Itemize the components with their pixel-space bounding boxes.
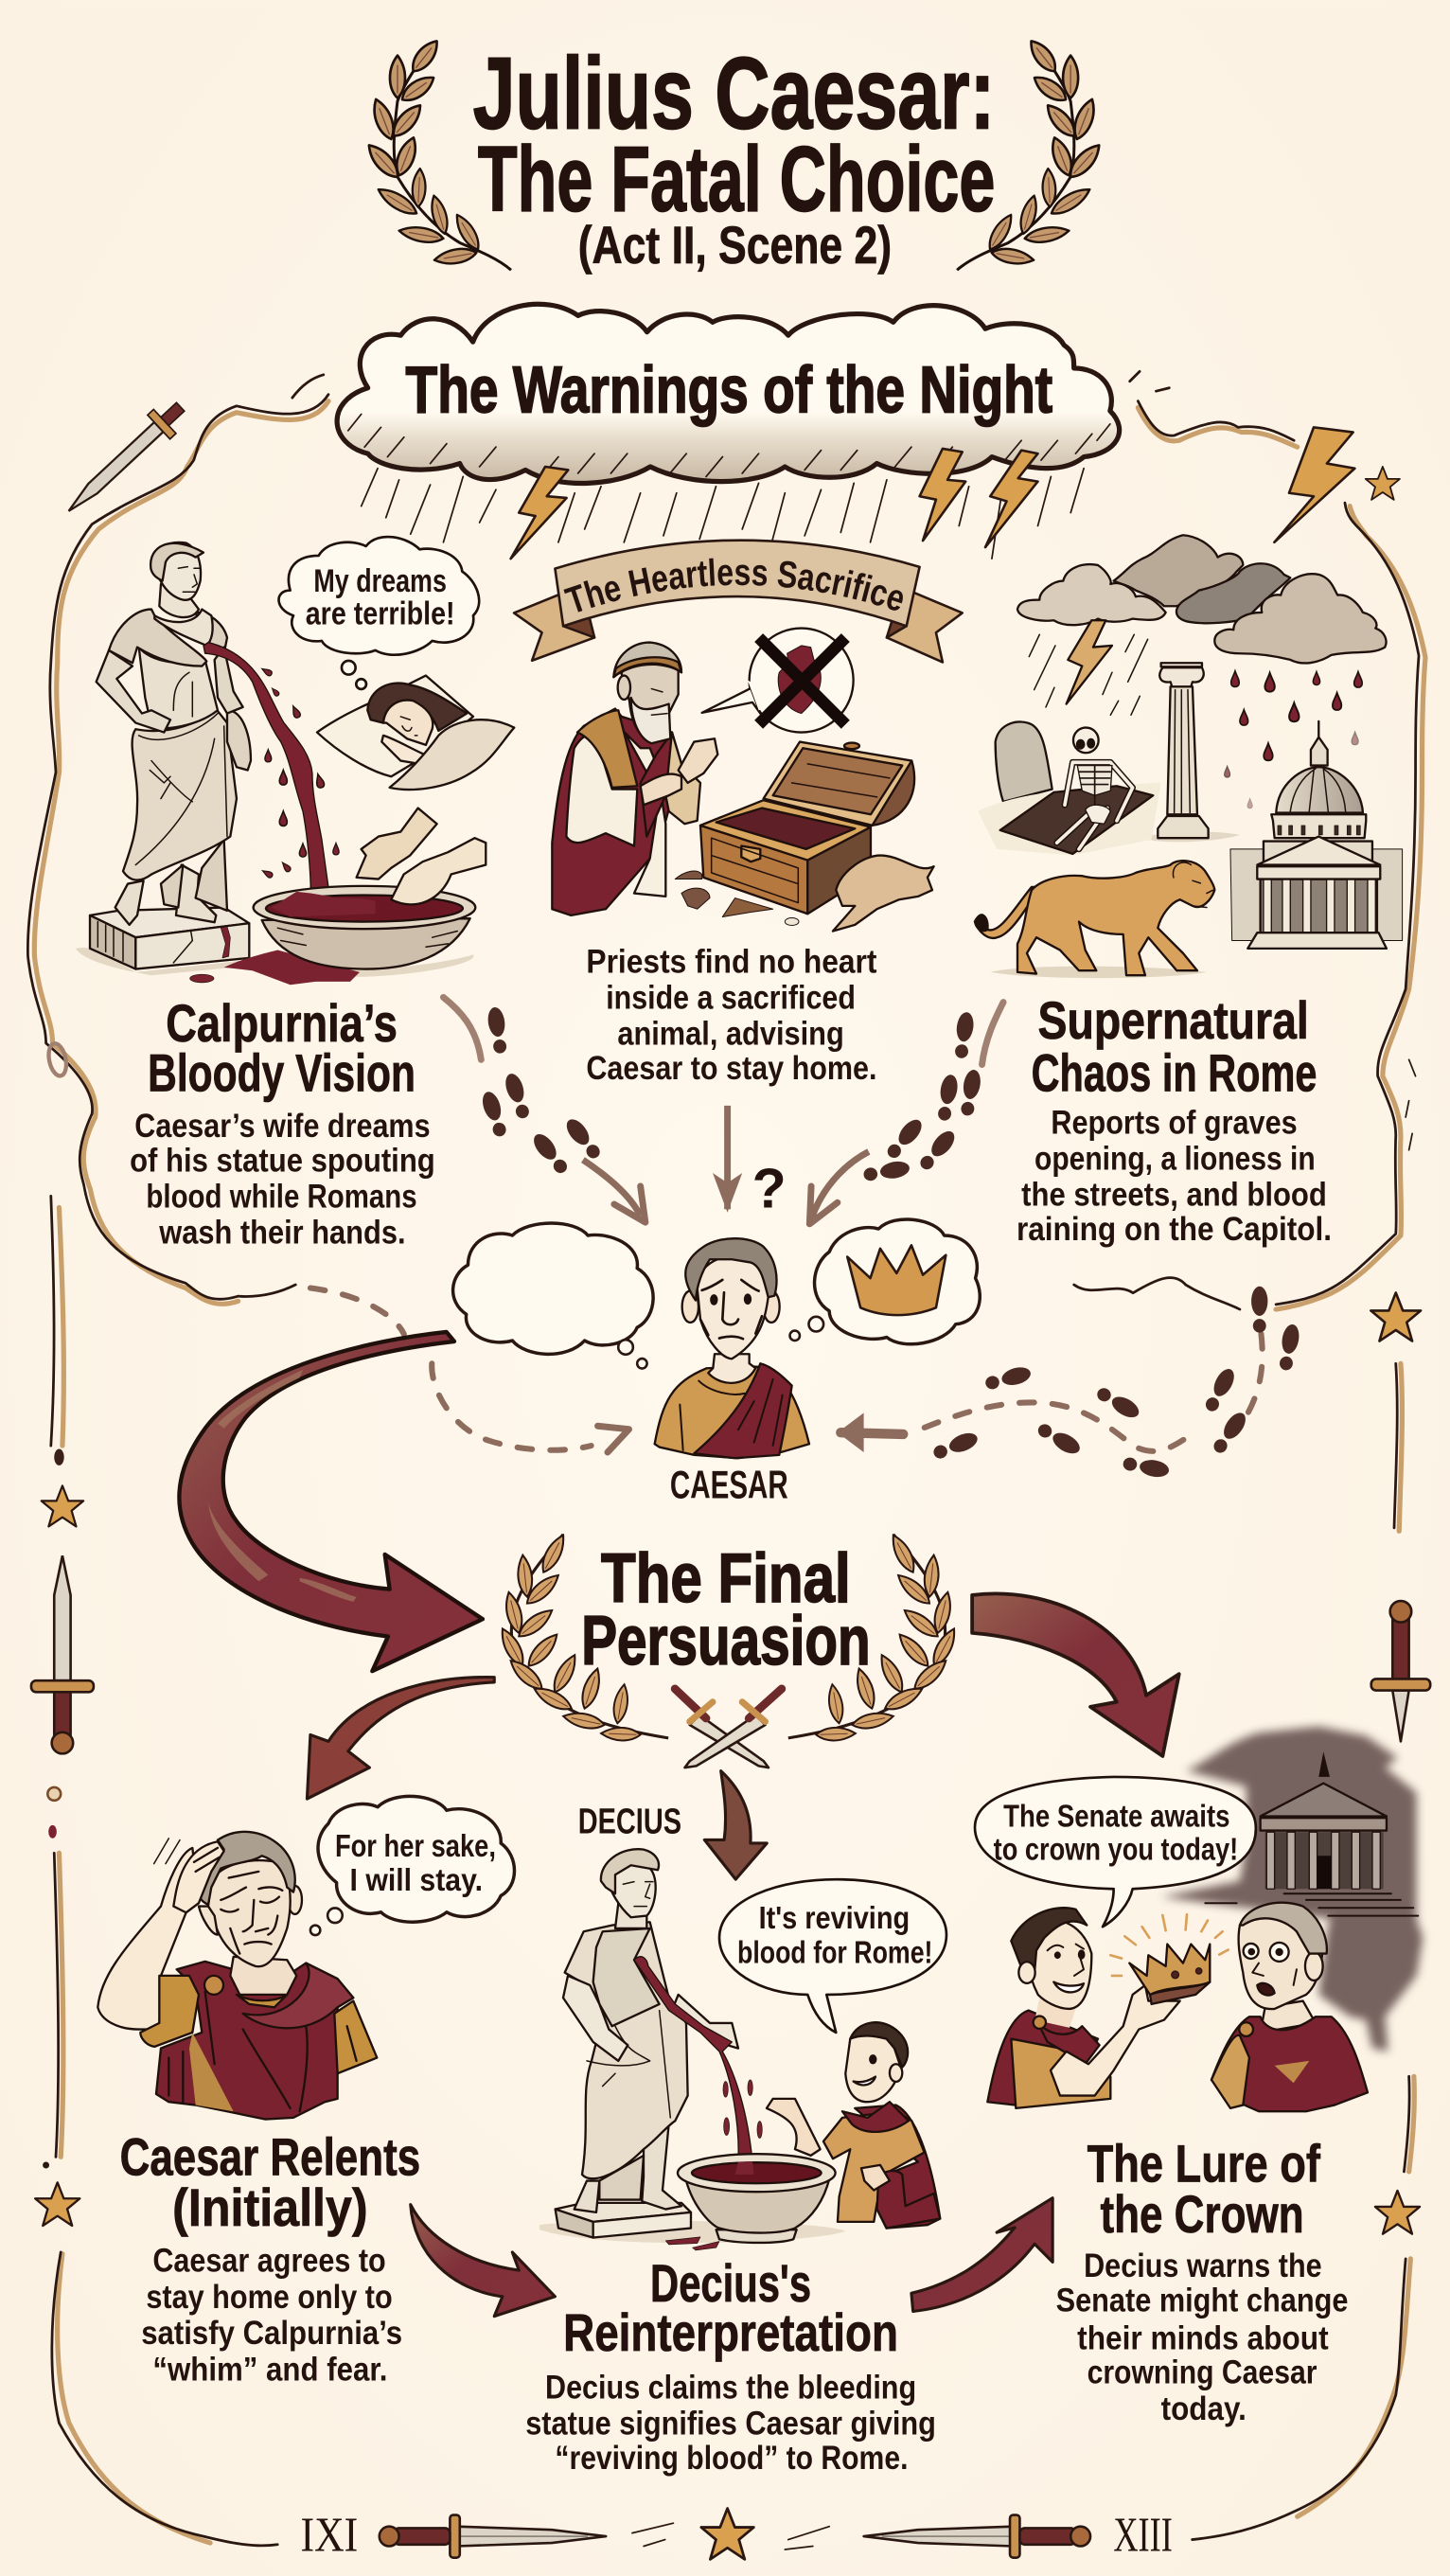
panel: The Lure of the Crown [975,1727,1423,2427]
icon: stones and scraps [675,871,799,926]
thought cloud empty [453,1223,653,1369]
icon: blood puddle [190,950,360,985]
arrow: Caesar relents to Decius [411,2205,555,2317]
body text: animal, advising [617,1015,844,1053]
icon: lioness [975,861,1214,978]
icon: star right lower [1375,2191,1420,2234]
body text [1056,2247,1348,2427]
banner: The Heartless Sacrifice [564,559,903,613]
bubble text: My dreams [313,563,447,599]
arrow: to Caesar Relents [307,1678,494,1799]
body text: “whim” and fear. [152,2350,387,2388]
body text [586,942,877,1087]
icon: top left dagger [58,395,191,523]
icon: lightning bolt three [985,451,1038,547]
illustration: priest, heart and chest [552,629,934,932]
body text [1017,1103,1332,1248]
body text [141,2242,402,2388]
illustration: Senate, Decius and Caesar [975,1727,1423,2111]
title line one: Julius Caesar: [473,37,995,151]
icon: left laurel branch [363,36,511,270]
panel heading second line: Chaos in Rome [1032,1043,1317,1102]
side marks left [46,1042,69,1466]
icon: big lightning bolt right [1274,427,1354,542]
subtitle: (Act II, Scene 2) [578,216,892,275]
panel heading: Caesar Relents [120,2127,420,2186]
body text: Decius claims the bleeding [545,2368,916,2406]
side dots left [47,1787,61,1839]
body text: Caesar’s wife dreams [134,1107,431,1145]
icon: storm clouds [1017,535,1387,663]
body text: satisfy Calpurnia’s [141,2314,402,2352]
body text [130,1107,435,1252]
icon: empty treasure chest [700,742,914,914]
heading text line two: Persuasion [581,1603,871,1679]
body text: wash their hands. [158,1214,406,1252]
footprints trail right [862,1003,1003,1183]
icon: Caesar holding head [97,1832,377,2120]
icon: bowl [254,886,475,969]
shadow [539,2221,845,2243]
panel heading: The Lure of [1088,2134,1320,2193]
panel: The Heartless Sacrifice [513,539,964,1087]
arrow: center down to Caesar [713,1106,742,1213]
icon: statue [563,1849,738,2212]
rain strokes [1029,634,1148,715]
icon: startled Caesar [1211,1903,1368,2111]
panel heading second line: (Initially) [172,2178,368,2237]
panel: Calpurnia's bloody vision [76,537,514,1252]
icon: lightning bolt one [511,467,568,559]
footprints trail left [443,997,604,1177]
body text: “reviving blood” to Rome. [555,2439,908,2477]
icon: gravestone [996,721,1052,802]
body text: today. [1161,2389,1247,2427]
figure: worried Caesar [453,1219,980,1507]
icon: star right middle [1370,1292,1421,1341]
upper panel wobbly frame [27,371,1425,1309]
body text: the streets, and blood [1021,1176,1327,1214]
arrow: Decius to the crown [911,2198,1052,2311]
bubble text: For her sake, [335,1828,496,1863]
icon: plinth [556,2203,691,2238]
arrow: to The Lure of the Crown [972,1593,1179,1756]
illustration: omens in Rome [975,535,1403,978]
icon: temple [1205,1751,1418,1916]
footer ornament [301,2509,1173,2563]
body text: statue signifies Caesar giving [525,2405,936,2443]
arrow: right trail to Caesar [809,1151,869,1224]
speech bubble: The Senate awaits [975,1777,1256,1927]
icon: marble bowl [665,2154,836,2250]
icon: priest [552,643,717,915]
body text: Caesar to stay home. [586,1049,876,1087]
icon: right laurel [788,1532,960,1741]
label: DECIUS: DECIUS [578,1802,681,1842]
body text: Priests find no heart [586,942,877,980]
panel: Decius's reinterpretation [525,1802,946,2477]
dashed path left to Caesar [310,1288,629,1452]
lower frame and side strokes [43,1853,1414,2546]
bubble text second line: blood for Rome! [737,1935,932,1970]
icon: right horizontal dagger [864,2515,1090,2558]
icon: crossed out heart [702,629,854,733]
icon: star left lower [35,2182,80,2226]
label: CAESAR: CAESAR [670,1463,788,1507]
body text: of his statue spouting [130,1141,435,1179]
heading text: The Warnings of the Night [406,353,1052,427]
panel heading second line: Reinterpretation [563,2303,898,2362]
panel heading: Supernatural [1038,991,1309,1050]
illustration: statue, bowl and sleeping wife [76,537,514,985]
bubble text: The Senate awaits [1003,1799,1230,1834]
body text: crowning Caesar [1088,2354,1317,2391]
icon: star left middle [42,1485,83,1526]
body text: blood while Romans [146,1177,417,1215]
icon: small lightning bolt [1067,620,1112,704]
icon: blood rain drops [1225,671,1362,808]
bubble text second line: are terrible! [306,596,455,632]
icon: blood pouring from the statue [203,643,376,913]
arrow: left trail to Caesar [583,1160,645,1222]
shadows [76,948,473,977]
heading text line one: The Final [601,1540,851,1617]
big arrow into The Final Persuasion [179,1332,483,1671]
body text: stay home only to [146,2278,393,2316]
body text: inside a sacrificed [606,979,856,1017]
icon: Decius offering crown [987,1908,1180,2108]
speech bubble: It's reviving blood [719,1879,946,2033]
banner text [572,585,907,614]
icon: left laurel [497,1532,668,1741]
icon: Capitol building [1230,721,1403,949]
title block [363,36,1105,275]
section heading: The Final Persuasion [497,1532,960,1768]
panel heading second line: Bloody Vision [148,1043,416,1102]
title line two: The Fatal Choice [478,127,995,230]
icon: Caesar bust [655,1238,809,1458]
question mark: ? [752,1158,787,1219]
icon: golden crown [847,1245,946,1315]
body text: Caesar agrees to [152,2242,386,2280]
icon: plinth [90,908,249,969]
roman numeral right: XIII [1113,2509,1173,2563]
side marks right [1394,1059,1416,1531]
heading cloud: The Warnings of the Night [337,304,1120,483]
body text: their minds about [1077,2318,1329,2356]
icon: small star top right [1366,467,1400,500]
thought cloud with crown [790,1219,980,1344]
illustration: statue, bowl and Decius [539,1849,946,2250]
body text: Reports of graves [1051,1103,1298,1141]
body text: Senate might change [1056,2281,1348,2318]
thought bubble: For her sake [310,1796,514,1935]
thought bubble: For her sake: I will stay. [350,1862,483,1897]
icon: left horizontal dagger [380,2515,606,2558]
dashed path and footprints right to Caesar [838,1287,1301,1479]
body text [525,2368,936,2477]
icon: golden crown offered [1110,1914,1229,2004]
bubble text: It's reviving [759,1900,910,1935]
icon: sacrificed animal [833,856,934,932]
icon: reviving blood stream [634,1957,762,2162]
thought bubble: My dreams are terrible [279,537,479,689]
icon: crossed daggers [675,1689,782,1768]
panel heading: Calpurnia’s [166,994,398,1053]
panel: Supernatural chaos in Rome [975,535,1403,1248]
icon: smiling Decius [767,2022,940,2229]
icon: smoke behind temple [1161,1727,1423,2052]
icon: left vertical dagger [31,1555,94,1753]
bubble text second line: to crown you today! [994,1831,1238,1866]
arrow: to Decius [704,1771,767,1879]
icon: Romans washing hands [357,808,486,904]
icon: center star [701,2509,753,2559]
body text: opening, a lioness in [1034,1140,1316,1178]
icon: column [1142,663,1240,842]
icon: open grave with skeleton [978,728,1161,856]
icon: right vertical dagger [1371,1601,1430,1741]
body text: Decius warns the [1084,2247,1322,2284]
body text: raining on the Capitol. [1017,1210,1332,1248]
roman numeral left: IXI [301,2509,358,2563]
icon: statue of Caesar [97,542,251,925]
icon: right laurel branch [957,36,1105,270]
icon: lightning bolt two [920,449,965,541]
panel: Caesar relents [97,1796,514,2388]
icon: sleeping Calpurnia [317,676,514,790]
panel heading: Decius's [650,2254,811,2313]
rain under the cloud [362,469,1084,559]
banner [513,539,964,664]
panel heading second line: the Crown [1100,2185,1304,2244]
small splash marks [292,371,1169,398]
